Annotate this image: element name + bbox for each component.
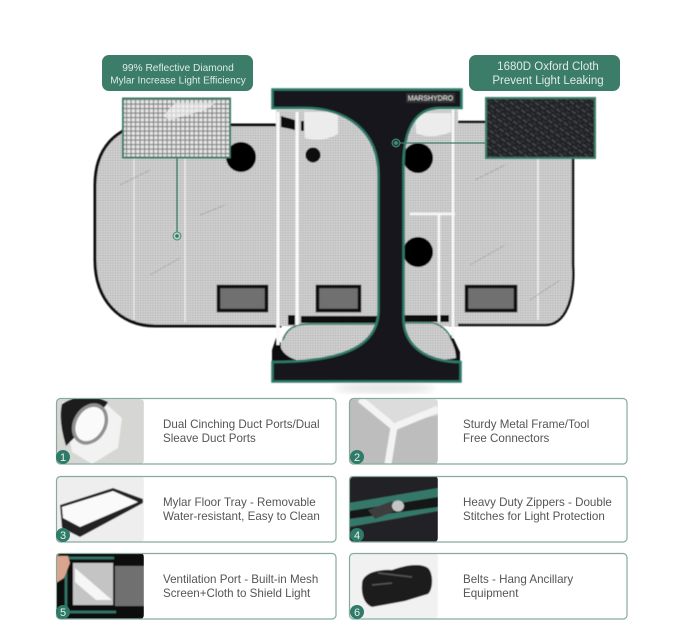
description	[163, 496, 320, 523]
tent interior right	[400, 110, 458, 326]
white frame rods left	[278, 112, 297, 345]
description: Ventilation Port - Built-in Mesh	[163, 573, 318, 586]
callout label: 99% Reflective Diamond	[122, 63, 234, 74]
right floor fringe	[420, 335, 460, 364]
top duct sleeve right	[415, 113, 451, 136]
feature card 6	[349, 553, 627, 619]
left mesh wall	[95, 125, 280, 326]
callout label	[102, 55, 253, 91]
inset: oxford weave	[486, 98, 595, 158]
callout: reflective mylar	[102, 55, 253, 240]
connector line	[400, 142, 485, 144]
feature card 1	[56, 396, 336, 464]
number badge: 1	[60, 452, 66, 464]
feature card 3	[56, 476, 336, 542]
white frame rods right	[410, 110, 455, 338]
mesh windows	[218, 286, 516, 310]
right interior floor	[400, 323, 456, 362]
callout label	[469, 55, 620, 91]
callout label: Mylar Increase Light Efficiency	[110, 76, 246, 86]
right floor back edge	[403, 315, 449, 322]
number badge: 6	[354, 607, 360, 619]
description: Sleave Duct Ports	[163, 432, 256, 445]
description: Equipment	[463, 587, 519, 600]
card outline	[56, 554, 336, 619]
description: Water-resistant, Easy to Clean	[163, 510, 320, 523]
left floor back edge	[288, 315, 380, 325]
logo	[406, 93, 455, 103]
connector dot	[392, 139, 400, 147]
left floor fringe	[272, 338, 330, 364]
logo: MARSHYDRO	[408, 96, 454, 102]
watermark streaks	[120, 165, 560, 300]
black strip left	[281, 116, 304, 131]
number badge	[56, 528, 70, 542]
right mesh wall	[450, 122, 573, 325]
description	[163, 418, 320, 445]
feature card 2	[349, 398, 627, 464]
card outline	[350, 476, 627, 542]
description: Stitches for Light Protection	[463, 510, 605, 523]
connector dot	[173, 232, 181, 240]
right lower duct port	[403, 237, 433, 267]
feature card 5	[56, 553, 336, 619]
card outline	[350, 554, 627, 619]
number badge	[350, 450, 364, 464]
card outline	[56, 476, 336, 542]
callout label: Prevent Light Leaking	[492, 75, 604, 87]
tent interior left	[276, 110, 380, 326]
callout: oxford cloth	[392, 55, 620, 158]
number badge	[56, 450, 70, 464]
floor outlines	[283, 323, 451, 340]
card outline	[56, 398, 336, 464]
feature card 4	[349, 476, 627, 542]
callout label: 1680D Oxford Cloth	[497, 61, 599, 73]
left duct port	[226, 142, 256, 172]
description: Screen+Cloth to Shield Light	[163, 587, 311, 600]
front panel with door opening	[272, 90, 462, 382]
photo: belts	[349, 553, 438, 619]
inner duct port left	[306, 148, 320, 162]
top duct sleeve left	[304, 112, 338, 140]
right upper duct port	[403, 143, 433, 173]
description	[463, 496, 612, 523]
photo: floor tray	[56, 476, 144, 542]
inset: diamond mylar	[123, 98, 230, 158]
number badge	[56, 605, 70, 619]
description: Mylar Floor Tray - Removable	[163, 496, 316, 509]
description	[463, 573, 573, 600]
description: Belts - Hang Ancillary	[463, 573, 573, 586]
description: Heavy Duty Zippers - Double	[463, 496, 612, 509]
vertical seams	[134, 125, 538, 322]
number badge: 4	[354, 530, 360, 542]
number badge	[350, 528, 364, 542]
description: Free Connectors	[463, 432, 550, 445]
description: Sturdy Metal Frame/Tool	[463, 418, 589, 431]
number badge: 5	[60, 607, 66, 619]
left interior floor	[281, 324, 380, 362]
photo: metal frame	[349, 399, 438, 464]
description	[163, 573, 318, 600]
photo: ventilation port	[56, 553, 144, 619]
number badge: 2	[354, 452, 360, 464]
card outline	[350, 398, 627, 464]
connector line	[176, 158, 178, 233]
grow tent illustration	[95, 90, 573, 393]
description	[463, 418, 589, 445]
photo: zipper	[349, 476, 438, 542]
number badge	[350, 605, 364, 619]
photo: duct port	[56, 396, 144, 464]
description: Dual Cinching Duct Ports/Dual	[163, 418, 320, 431]
number badge: 3	[60, 530, 66, 542]
